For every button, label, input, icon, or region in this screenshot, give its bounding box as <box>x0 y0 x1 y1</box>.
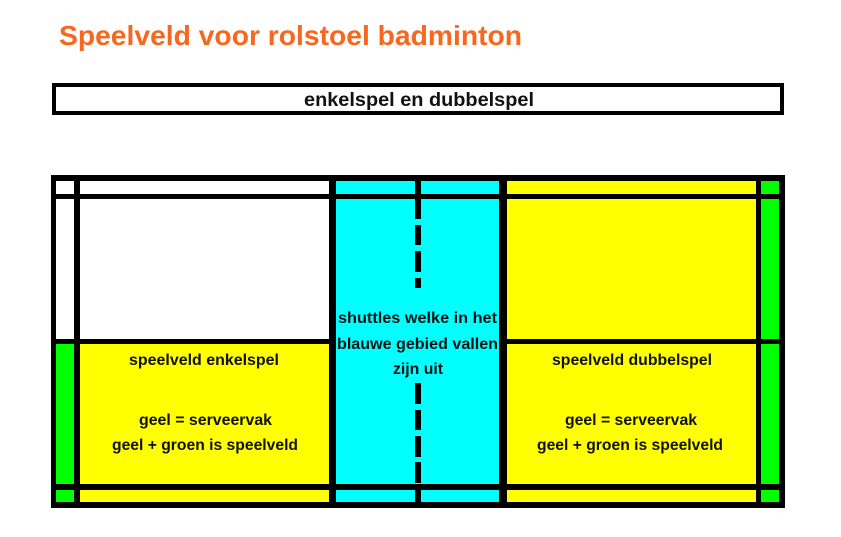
label: doubles court: speelveld dubbelspel <box>552 352 712 369</box>
label: out zone: blauwe gebied vallen <box>337 336 498 353</box>
label: out zone: zijn uit <box>393 361 444 378</box>
label: doubles court: geel = serveervak <box>565 412 697 429</box>
label: out zone: shuttles welke in het <box>338 310 498 327</box>
title: Speelveld voor rolstoel badminton <box>59 20 522 51</box>
label: doubles court: geel + groen is speelveld <box>537 437 723 454</box>
dashed centre line <box>415 181 421 502</box>
label: out zone <box>337 310 498 378</box>
label: doubles court <box>537 352 723 454</box>
label: singles court: speelveld enkelspel <box>129 352 279 369</box>
right green zones <box>761 181 779 502</box>
left yellow zones <box>80 344 329 502</box>
left green zones <box>56 344 74 502</box>
label: singles court <box>112 352 298 454</box>
label: singles court: geel + groen is speelveld <box>112 437 298 454</box>
subtitle box: enkelspel en dubbelspel <box>304 89 534 111</box>
right yellow zones <box>507 181 756 502</box>
left singles side, upper white area <box>56 181 329 339</box>
court outline and lines <box>51 175 785 508</box>
blue out zone <box>336 181 499 502</box>
badminton court diagram <box>51 175 785 508</box>
subtitle box <box>54 85 782 113</box>
label: singles court: geel = serveervak <box>139 412 272 429</box>
